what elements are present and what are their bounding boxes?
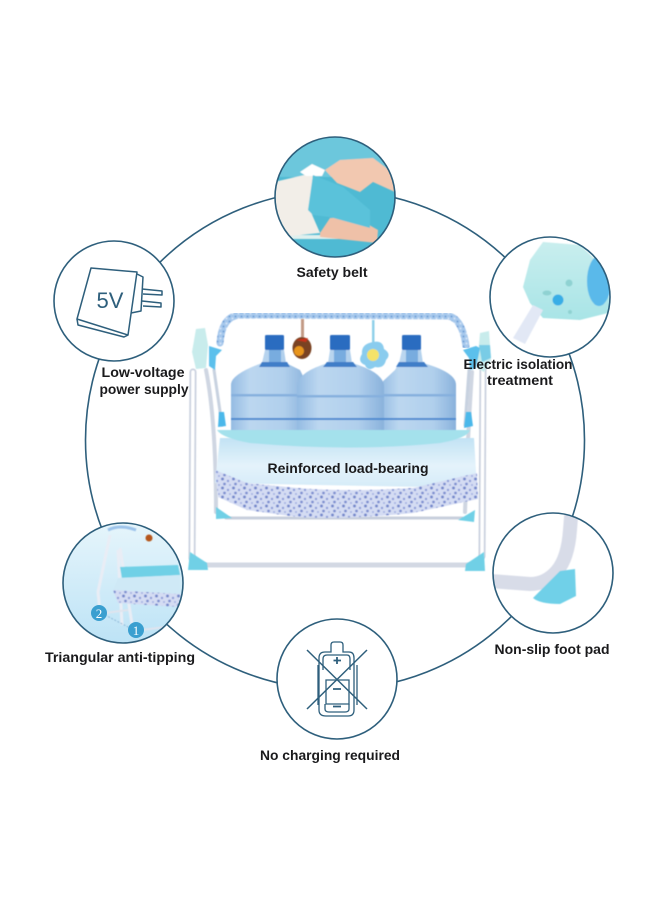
infographic canvas — [45, 136, 614, 763]
label: electric isolation treatment — [464, 357, 572, 388]
label: non-slip foot pad: Non-slip foot pad — [494, 642, 610, 657]
label: electric isolation treatment: treatment — [487, 373, 554, 388]
skirt — [215, 438, 477, 488]
icon: crossed-out battery — [307, 642, 367, 716]
left bottle — [231, 335, 307, 435]
middle bottle — [297, 335, 384, 435]
product: baby swing with water bottles — [188, 315, 491, 571]
floral ruffle — [215, 470, 478, 518]
label: low-voltage power supply: power supply — [100, 382, 189, 397]
icon: 5V plug adapter: 5V — [97, 288, 124, 313]
foot pads — [188, 507, 485, 571]
right bottle — [380, 335, 456, 435]
hanging string and flower toy — [360, 320, 389, 369]
callout: no charging required — [277, 619, 397, 739]
callout: electric isolation — [490, 237, 612, 357]
label: reinforced load-bearing: Reinforced load-bearing — [268, 461, 428, 476]
connecting ring — [86, 190, 584, 690]
callout: safety belt — [270, 135, 395, 257]
label: triangular anti-tipping: Triangular anti-tipping — [45, 650, 195, 665]
label: safety belt: Safety belt — [296, 265, 368, 280]
label: low-voltage power supply: Low-voltage — [102, 365, 185, 380]
callout: low-voltage power supply — [54, 241, 174, 361]
label: electric isolation treatment: Electric isolation — [464, 357, 572, 372]
canopy bar — [220, 315, 466, 346]
callout: triangular anti-tipping — [63, 523, 183, 643]
basket tray — [217, 430, 470, 448]
hanging string and brown toy — [292, 319, 312, 359]
badge 2: 2 — [96, 606, 102, 621]
label: no charging required: No charging required — [260, 748, 400, 763]
left controller — [192, 328, 226, 427]
callout: non-slip foot pad — [490, 505, 613, 633]
swing frame — [192, 365, 483, 565]
label: low-voltage power supply — [100, 365, 189, 397]
right controller — [463, 331, 491, 428]
badge 1: 1 — [133, 623, 139, 638]
